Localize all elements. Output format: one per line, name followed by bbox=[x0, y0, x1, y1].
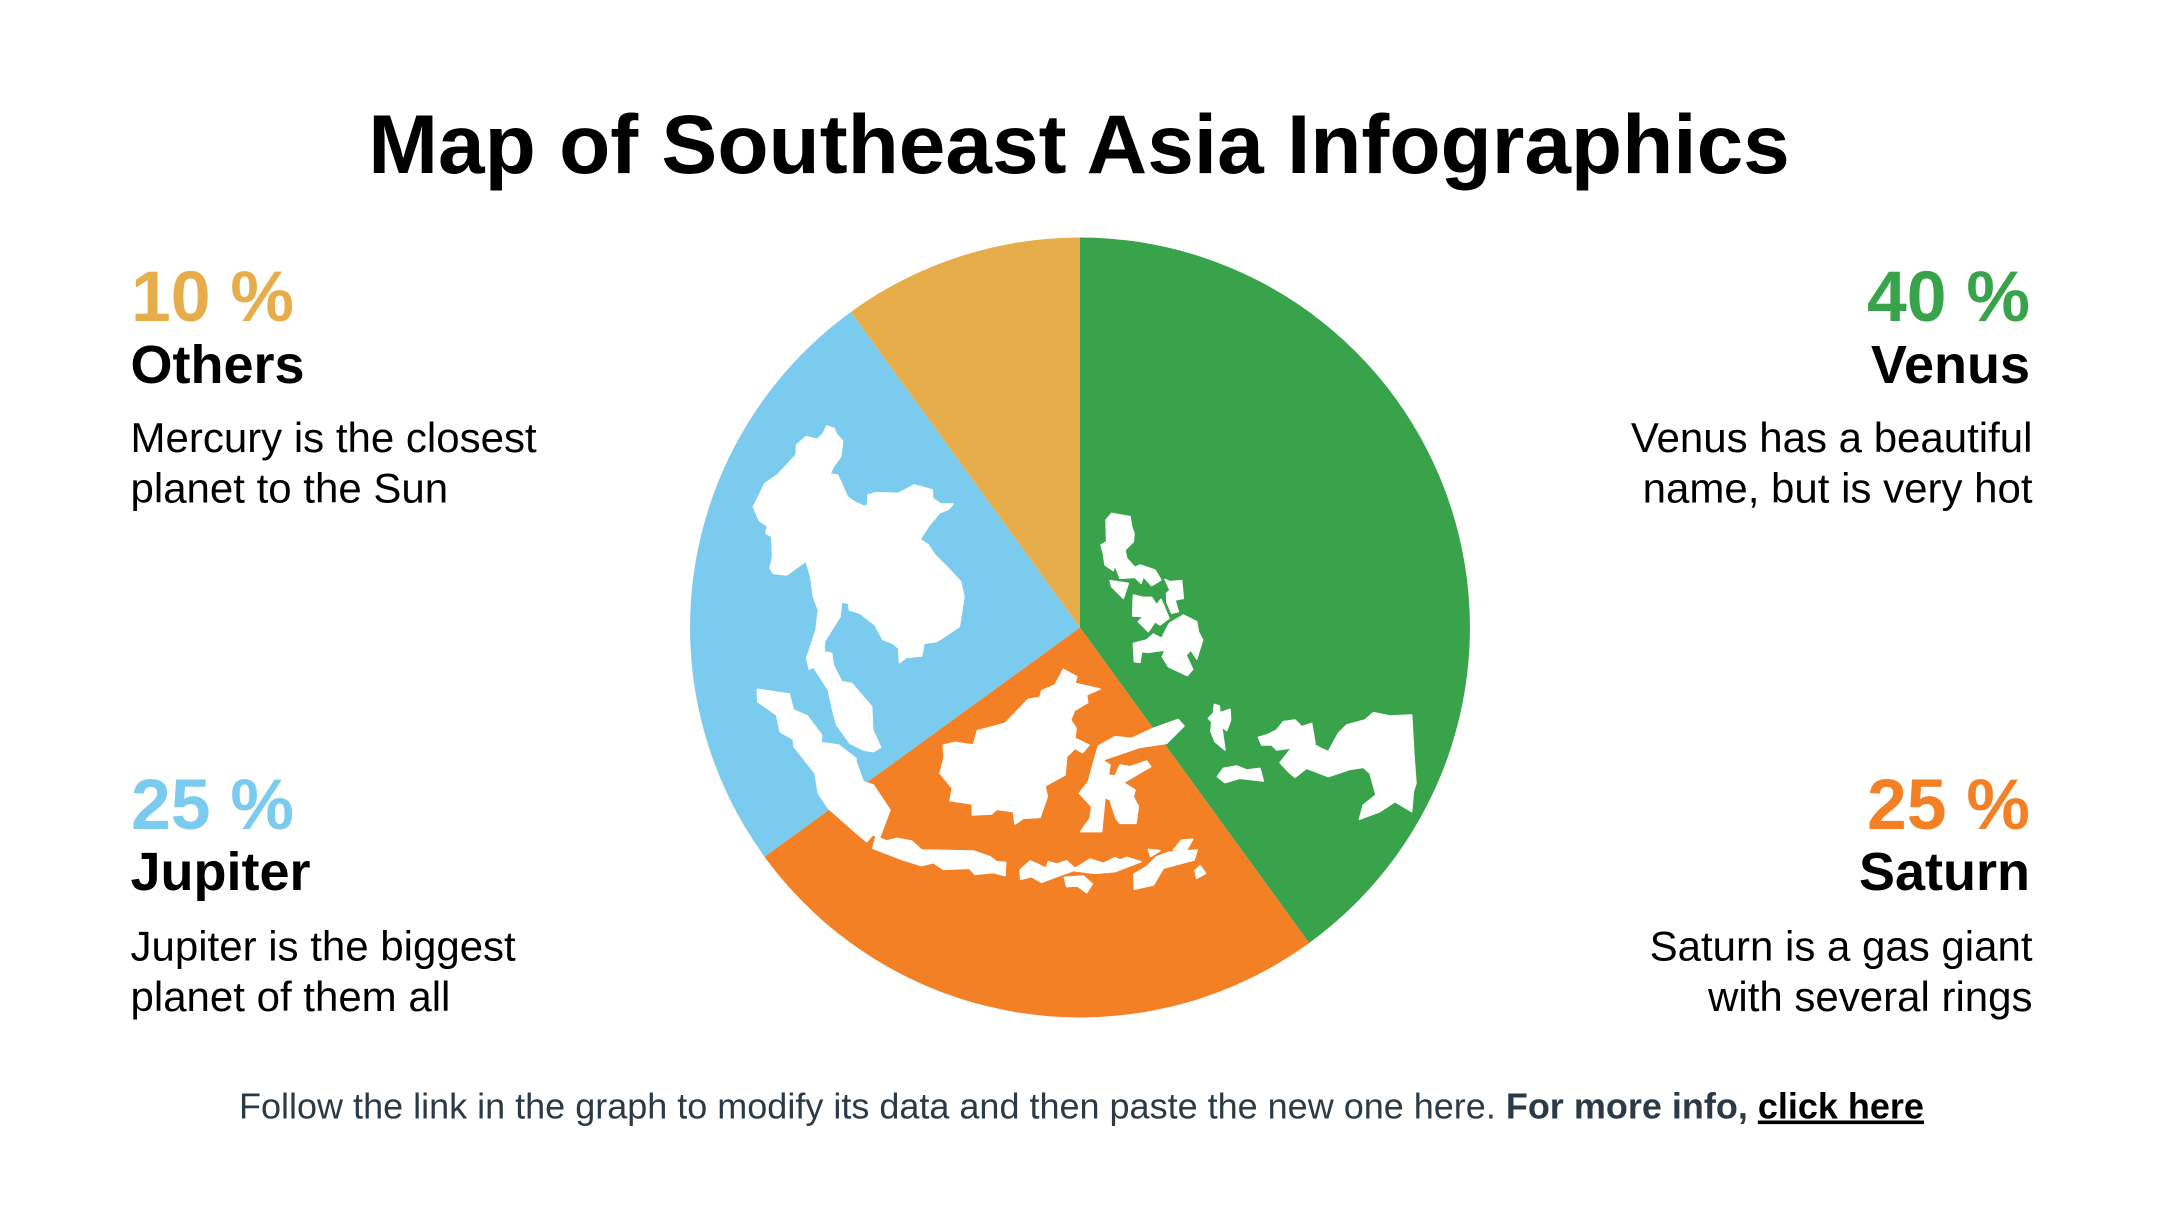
block: Venus bbox=[1631, 257, 2033, 512]
description: Venus: Venus has a beautiful bbox=[1631, 414, 2032, 461]
block: Jupiter bbox=[130, 765, 516, 1020]
percentage: 25% Jupiter: 25 % bbox=[131, 765, 294, 845]
slice: Others 10% bbox=[851, 238, 1080, 628]
map of Southeast Asia bbox=[753, 426, 1416, 893]
slice: Saturn 25% bbox=[764, 628, 1309, 1017]
pie chart bbox=[690, 238, 1470, 1017]
description: Others: Mercury is the closest bbox=[130, 414, 537, 461]
slice: Jupiter 25% bbox=[690, 312, 1080, 857]
label: Others: Others bbox=[130, 335, 305, 395]
label: Venus: Venus bbox=[1871, 335, 2030, 395]
description: Venus: name, but is very hot bbox=[1643, 464, 2033, 512]
percentage: 10%: 10 % bbox=[131, 257, 294, 337]
description: Others: planet to the Sun bbox=[130, 464, 448, 512]
percentage: 25% Saturn: 25 % bbox=[1867, 765, 2030, 845]
slice: Venus 40% bbox=[1080, 238, 1470, 943]
map: mainland and Sumatra bbox=[753, 426, 964, 842]
title: Map of Southeast Asia Infographics bbox=[368, 97, 1790, 191]
description: Saturn: with several rings bbox=[1707, 973, 2032, 1020]
description: Jupiter: planet of them all bbox=[130, 973, 450, 1020]
label: Saturn: Saturn bbox=[1859, 842, 2030, 902]
footer note: Follow the link in the graph to modify its data and then paste the new one here. For more info, click here bbox=[239, 1086, 1924, 1126]
block: Others bbox=[130, 257, 537, 512]
description: Saturn: Saturn is a gas giant bbox=[1650, 922, 2033, 970]
map: Philippines and eastern islands bbox=[1101, 513, 1416, 819]
label: Jupiter: Jupiter bbox=[130, 842, 311, 902]
description: Jupiter: Jupiter is the biggest bbox=[130, 922, 516, 970]
map: Indonesian islands bbox=[873, 669, 1206, 893]
percentage: 40%: 40 % bbox=[1867, 257, 2030, 337]
block: Saturn bbox=[1650, 765, 2033, 1020]
